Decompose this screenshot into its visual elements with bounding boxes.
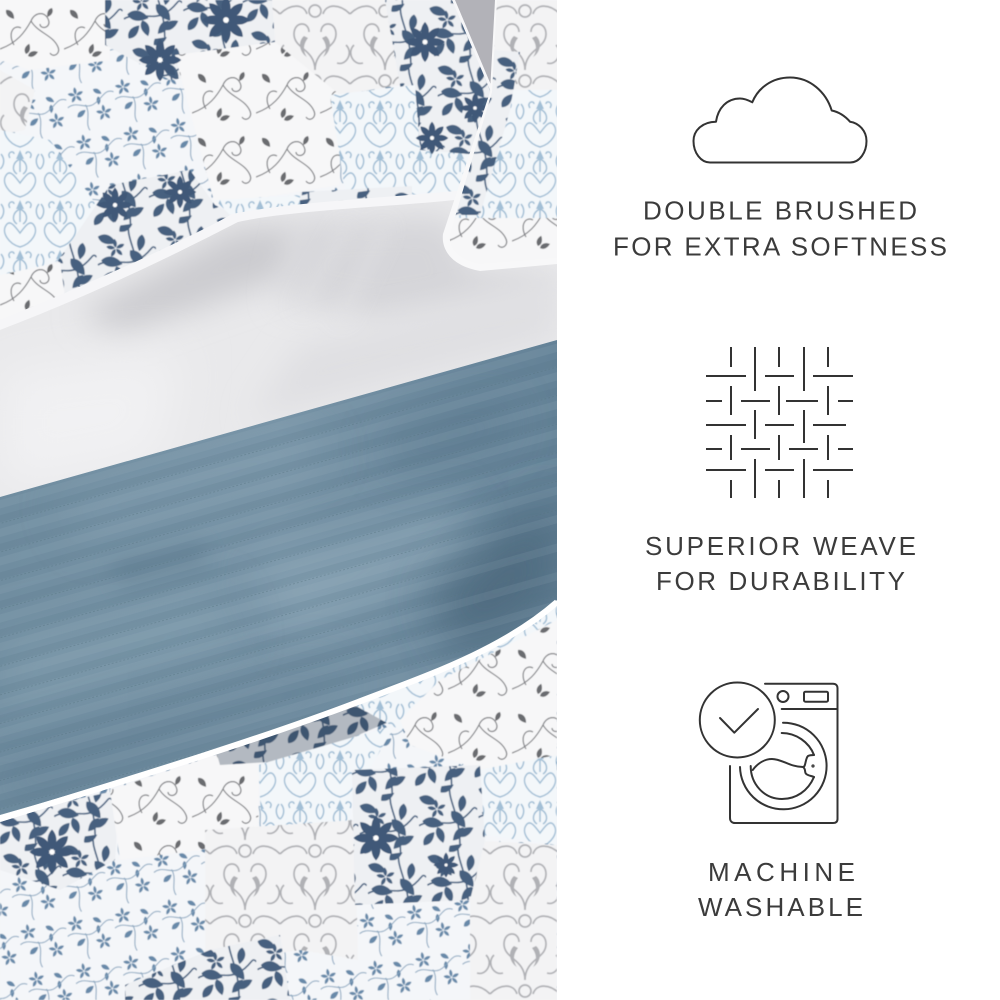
heading: superior weave: FOR DURABILITY xyxy=(656,566,905,596)
pillow: right patchwork xyxy=(440,0,560,271)
flat sheet xyxy=(0,0,557,520)
heading: machine washable xyxy=(698,857,863,922)
white piping along quilt edge xyxy=(0,602,557,819)
pillow: left patchwork xyxy=(0,0,500,340)
icon: cloud xyxy=(694,78,866,162)
heading: double brushed xyxy=(613,196,947,262)
heading: superior weave: SUPERIOR WEAVE xyxy=(645,531,916,561)
icon: weave xyxy=(706,347,853,498)
blue quilted band xyxy=(0,340,557,815)
white divider column xyxy=(557,0,1000,1000)
heading: machine washable: MACHINE xyxy=(708,857,855,887)
heading: double brushed: DOUBLE BRUSHED xyxy=(643,196,917,226)
lower quilt patchwork xyxy=(0,600,560,1000)
heading: superior weave xyxy=(645,531,916,596)
heading: machine washable: WASHABLE xyxy=(698,892,863,922)
heading: double brushed: FOR EXTRA SOFTNESS xyxy=(613,232,947,262)
icon: washing machine with check xyxy=(700,682,838,823)
panel: bedding photo xyxy=(0,0,600,1000)
